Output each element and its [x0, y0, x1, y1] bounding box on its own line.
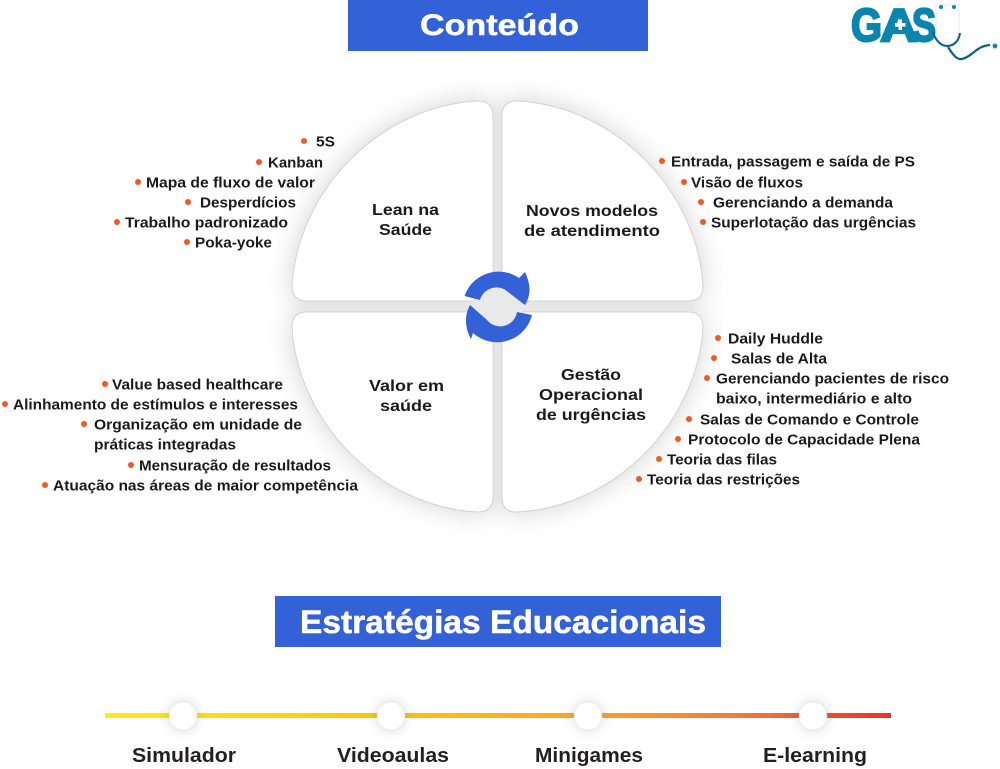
logo: GAS stethoscope — [851, 0, 998, 59]
list: Gestão Operacional topics: Protocolo de Capacidade Plena — [688, 432, 921, 448]
list: Lean na Saúde topics: 5S — [316, 134, 335, 150]
list: Lean na Saúde topics — [114, 134, 335, 252]
node: Simulador: Simulador — [132, 745, 236, 767]
heading: Estratégias Educacionais: Estratégias Educacionais — [300, 604, 706, 640]
list: Valor em saúde topics: práticas integradas — [94, 438, 236, 454]
list: Novos modelos topics: Entrada, passagem e saída de PS — [671, 154, 915, 170]
panel: Valor em saúde: Valor em — [369, 378, 444, 395]
list: Valor em saúde topics: Organização em unidade de — [94, 418, 302, 434]
list: Lean na Saúde topics: Poka-yoke — [195, 236, 272, 252]
panel: Gestão Operacional de urgências — [502, 312, 703, 512]
list: Gestão Operacional topics: Teoria das filas — [667, 452, 777, 468]
node: Minigames: Minigames — [535, 745, 643, 767]
list: Valor em saúde topics — [2, 378, 359, 494]
list: Lean na Saúde topics: Mapa de fluxo de valor — [146, 176, 315, 192]
list: Novos modelos topics — [659, 154, 916, 232]
panel: Lean na Saúde — [292, 101, 493, 301]
node: Videoaulas — [337, 702, 449, 767]
heading: Estratégias Educacionais — [275, 596, 721, 647]
logo: GAS stethoscope: G — [851, 0, 882, 51]
list: Valor em saúde topics: Value based healthcare — [112, 378, 283, 394]
list: Novos modelos topics: Visão de fluxos — [691, 176, 803, 192]
list: Gestão Operacional topics — [636, 332, 949, 488]
logo: GAS stethoscope: S — [912, 0, 936, 51]
list: Gestão Operacional topics: Teoria das restrições — [647, 472, 800, 488]
panel: Novos modelos de atendimento: Novos modelos — [526, 203, 658, 220]
heading: Conteúdo — [348, 0, 648, 51]
list: Gestão Operacional topics: Gerenciando pacientes de risco — [716, 372, 949, 388]
panel: Gestão Operacional de urgências: Gestão — [561, 367, 621, 384]
panel: Lean na Saúde: Lean na — [372, 202, 439, 219]
panel: Lean na Saúde: Saúde — [379, 222, 432, 239]
list: Lean na Saúde topics: Trabalho padronizado — [125, 216, 288, 232]
panel: Gestão Operacional de urgências: de urgências — [536, 407, 646, 424]
list: Valor em saúde topics: Atuação nas áreas de maior competência — [53, 478, 359, 494]
node: Videoaulas: Videoaulas — [337, 745, 449, 767]
list: Novos modelos topics: Gerenciando a demanda — [713, 196, 894, 212]
list: Lean na Saúde topics: Desperdícios — [200, 196, 296, 212]
list: Valor em saúde topics: Alinhamento de estímulos e interesses — [13, 398, 298, 414]
list: Gestão Operacional topics: Salas de Comando e Controle — [700, 412, 919, 428]
logo: GAS stethoscope: A — [880, 0, 918, 51]
list: Gestão Operacional topics: Daily Huddle — [728, 332, 823, 348]
quadrant diagram — [292, 101, 703, 512]
panel: Novos modelos de atendimento — [502, 101, 703, 301]
panel: Gestão Operacional de urgências: Operacional — [539, 387, 643, 404]
node: Minigames — [535, 702, 643, 767]
list: Novos modelos topics: Superlotação das urgências — [711, 216, 916, 232]
icon: cycle arrows — [464, 272, 532, 342]
list: Lean na Saúde topics: Kanban — [268, 156, 323, 172]
panel: Novos modelos de atendimento: de atendimento — [524, 223, 660, 240]
list: Gestão Operacional topics: baixo, intermediário e alto — [716, 392, 912, 408]
timeline: educational strategies — [105, 702, 891, 767]
heading: Conteúdo: Conteúdo — [420, 9, 579, 42]
node: E-learning — [763, 702, 867, 767]
node: Simulador — [132, 702, 236, 767]
node: E-learning: E-learning — [763, 745, 867, 767]
list: Valor em saúde topics: Mensuração de resultados — [139, 458, 331, 474]
panel: Valor em saúde: saúde — [380, 398, 432, 415]
list: Gestão Operacional topics: Salas de Alta — [731, 352, 828, 368]
panel: Valor em saúde — [292, 312, 493, 512]
